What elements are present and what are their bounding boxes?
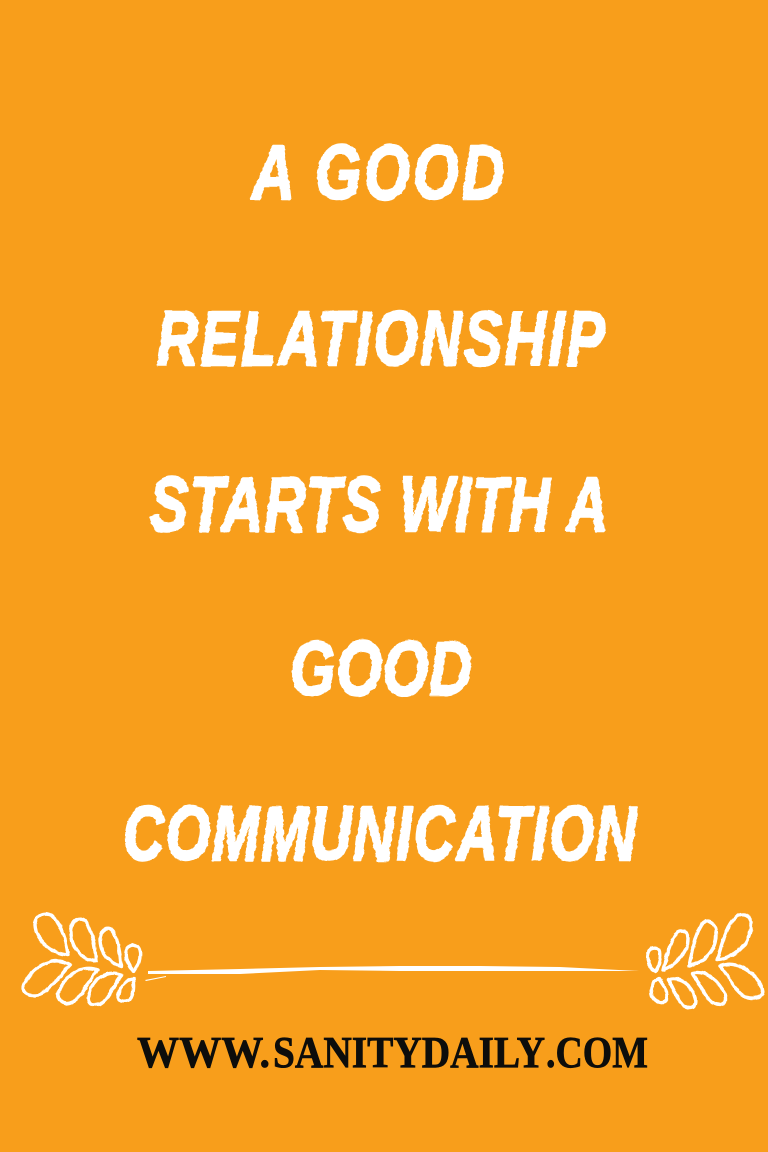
icon: right leaf sprig <box>648 914 762 1007</box>
title: quote: COMMUNICATION <box>123 792 638 877</box>
title: quote: GOOD <box>290 626 472 712</box>
website url: .COM <box>546 1028 648 1077</box>
title: quote <box>123 130 638 877</box>
title: quote: STARTS WITH A <box>150 463 608 548</box>
title: quote: A GOOD <box>250 130 504 216</box>
website url <box>137 1028 648 1077</box>
website url: SANITYDAILY <box>273 1028 545 1077</box>
icon: left leaf sprig <box>23 914 140 1005</box>
title: quote: RELATIONSHIP <box>157 297 605 382</box>
website url: WWW. <box>137 1028 270 1077</box>
divider: brush line <box>145 966 639 981</box>
